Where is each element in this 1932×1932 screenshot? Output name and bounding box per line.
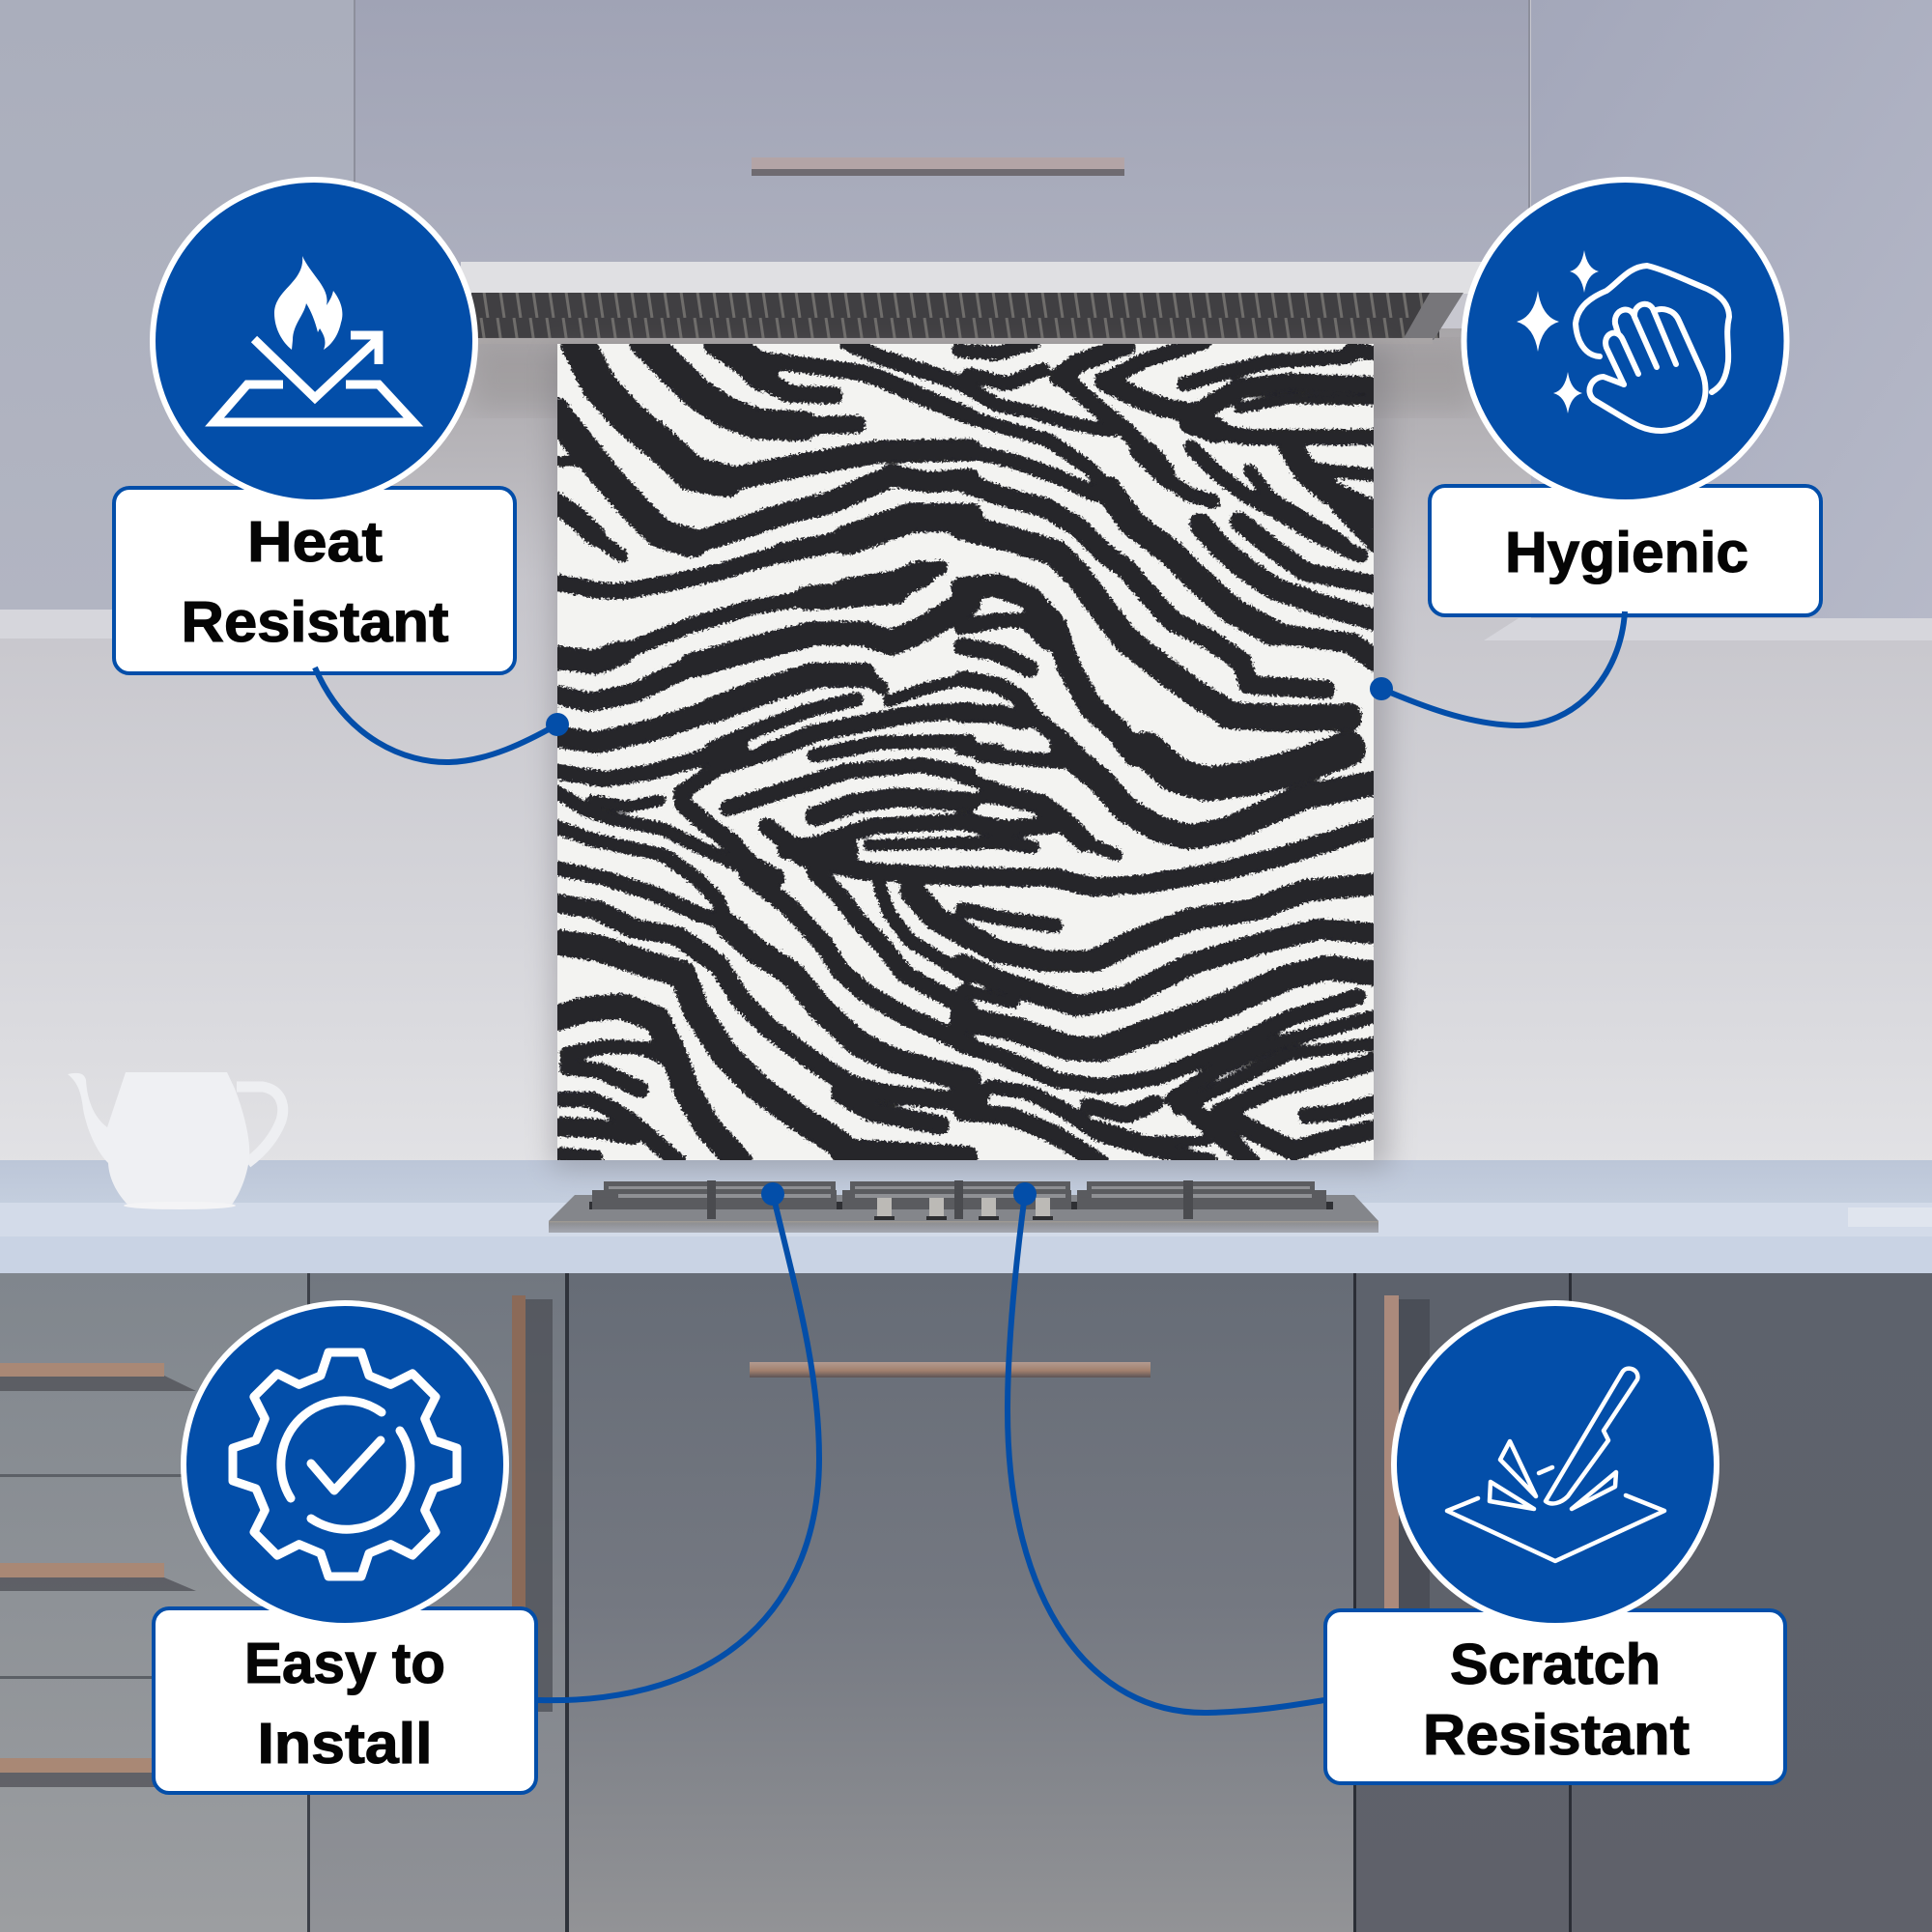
connector: Scratch Resistant	[1008, 1194, 1324, 1713]
zebra print splashback panel	[557, 344, 1374, 1160]
label box: Heat Resistant: Heat	[247, 510, 383, 574]
label box: Easy to Install: Easy to	[244, 1632, 445, 1695]
label box: Hygienic	[1430, 486, 1821, 615]
icon: flame over surface with arrow	[156, 183, 472, 499]
label box: Easy to Install: Install	[257, 1712, 433, 1776]
callout: Scratch Resistant	[1008, 1182, 1785, 1783]
dot: Heat Resistant	[546, 713, 569, 736]
badge circle: Hygienic	[1461, 177, 1789, 505]
connector: Hygienic	[1381, 611, 1625, 725]
icon: knife scratching surface	[1397, 1306, 1714, 1623]
label box: Scratch Resistant	[1325, 1610, 1785, 1783]
wall shadow under hood	[471, 344, 1476, 412]
badge circle: Heat Resistant	[150, 177, 478, 505]
label box: Scratch Resistant: Resistant	[1423, 1703, 1690, 1767]
label box: Hygienic: Hygienic	[1505, 521, 1748, 584]
icon: hand wiping with sparkles	[1466, 183, 1783, 499]
badge circle: Scratch Resistant	[1391, 1300, 1719, 1629]
label box: Easy to Install	[154, 1608, 536, 1793]
kettle	[68, 1072, 283, 1209]
dot: Hygienic	[1370, 677, 1393, 700]
label box: Heat Resistant: Resistant	[182, 590, 448, 654]
panel shadow	[553, 348, 1389, 1169]
icon: gear with check mark	[186, 1306, 503, 1623]
upper cabinets	[0, 0, 1932, 640]
callout: Hygienic	[1370, 177, 1821, 725]
range hood	[461, 262, 1485, 344]
cooktop	[549, 1180, 1378, 1233]
dot: Easy to Install	[761, 1182, 784, 1206]
lower cabinets	[0, 1273, 1932, 1932]
countertop	[0, 1160, 1932, 1273]
connector: Heat Resistant	[315, 668, 557, 762]
dot: Scratch Resistant	[1013, 1182, 1037, 1206]
cabinet handle: top	[752, 157, 1124, 176]
connector: Easy to Install	[538, 1194, 819, 1700]
cabinet handles: lower	[0, 1295, 1430, 1787]
callout: Heat Resistant	[114, 177, 569, 762]
label box: Scratch Resistant: Scratch	[1450, 1633, 1661, 1696]
label box: Heat Resistant	[114, 488, 515, 673]
background: wall	[0, 328, 1932, 1169]
badge circle: Easy to Install	[181, 1300, 509, 1629]
callout: Easy to Install	[154, 1182, 819, 1793]
